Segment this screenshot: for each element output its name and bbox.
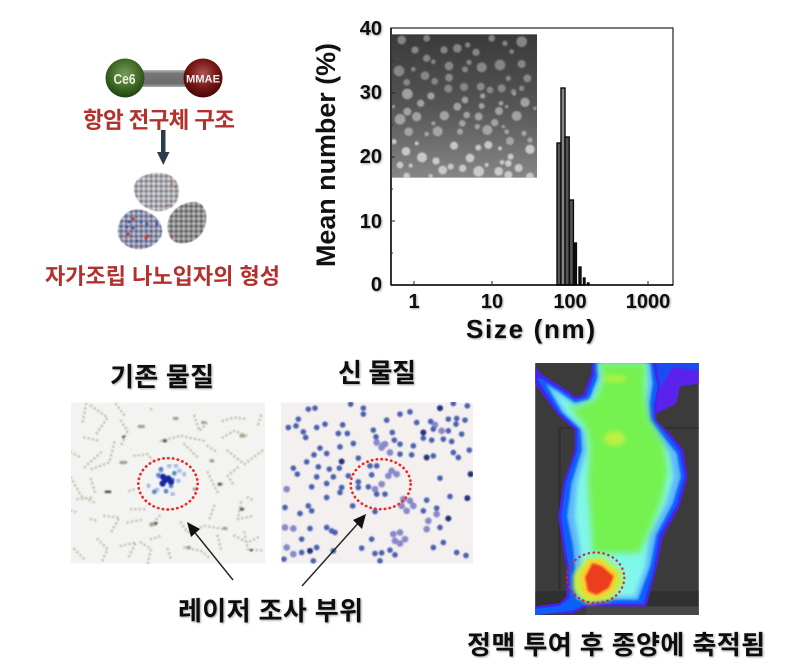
caption: laser irradiation site: 레이저 조사 부위 bbox=[178, 596, 363, 626]
panel: size distribution chart bbox=[311, 18, 673, 344]
inset: TEM micrograph bbox=[392, 34, 537, 178]
molecule: Ce6 linked to MMAE bbox=[106, 58, 222, 98]
chart axes and ticks bbox=[391, 28, 673, 285]
y axis tick labels bbox=[360, 18, 382, 296]
y axis title: Mean number (%) bbox=[311, 43, 341, 267]
image: existing material cells bbox=[71, 402, 265, 564]
image: new material cells bbox=[281, 402, 473, 564]
image: mouse fluorescence bbox=[535, 363, 699, 615]
arrow: to existing material spot bbox=[187, 522, 233, 580]
caption: accumulates in tumor after IV injection: 정맥 투여 후 종양에 축적됨 bbox=[467, 630, 765, 660]
panel: new material micrograph bbox=[281, 358, 473, 564]
x axis tick labels: 1 bbox=[408, 291, 420, 313]
y axis tick labels: 30 bbox=[360, 82, 382, 104]
y axis tick labels: 20 bbox=[360, 146, 382, 168]
molecule: Ce6 linked to MMAE: MMAE bbox=[186, 74, 220, 86]
heading: prodrug structure: 항암 전구체 구조 bbox=[83, 108, 235, 133]
molecule: Ce6 linked to MMAE: Ce6 bbox=[114, 71, 136, 88]
heading: new material: 신 물질 bbox=[338, 358, 416, 388]
x axis title: Size (nm) bbox=[466, 314, 595, 344]
panel: in vivo fluorescence image bbox=[535, 363, 699, 615]
heading: existing material: 기존 물질 bbox=[110, 362, 214, 392]
x axis tick labels: 100 bbox=[553, 291, 587, 313]
arrow: to new material spot bbox=[302, 514, 366, 586]
bars: size histogram bbox=[557, 88, 589, 285]
y axis tick labels: 0 bbox=[371, 274, 382, 296]
icon: protein-like nanoparticles bbox=[118, 173, 206, 249]
panel: existing material micrograph bbox=[71, 362, 265, 564]
heading: self-assembled nanoparticle formation: 자가조립 나노입자의 형성 bbox=[45, 264, 280, 289]
y axis tick labels: 10 bbox=[360, 211, 382, 233]
panel: prodrug structure bbox=[45, 58, 280, 289]
x axis tick labels: 10 bbox=[481, 291, 503, 313]
arrow: self-assembly bbox=[157, 130, 170, 165]
x axis tick labels: 1000 bbox=[626, 291, 670, 313]
x axis tick labels bbox=[408, 291, 670, 313]
y axis tick labels: 40 bbox=[360, 18, 382, 40]
stained spot bbox=[148, 466, 184, 494]
